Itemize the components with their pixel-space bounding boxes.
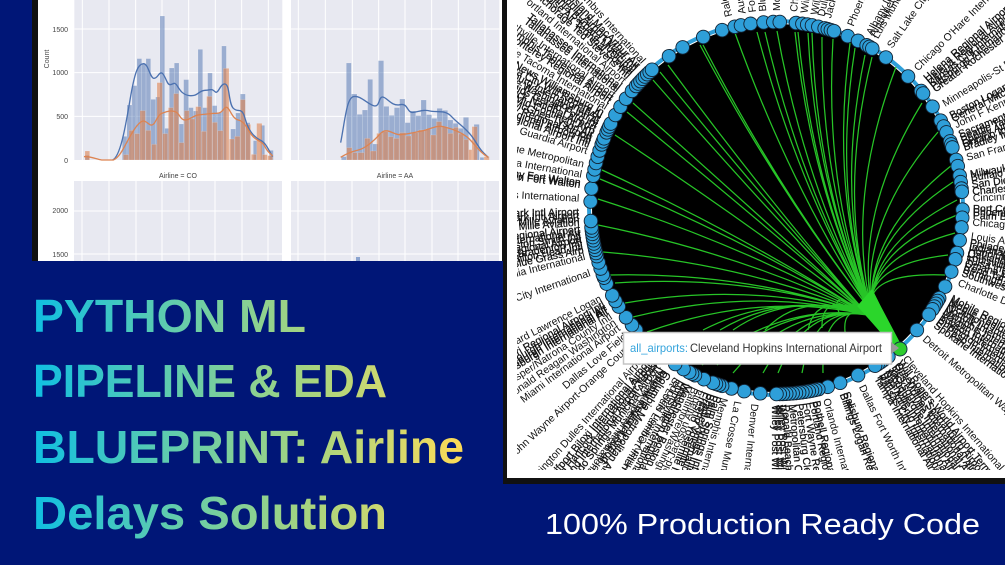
airport labels: Baltimore/Washington International	[623, 385, 700, 539]
airport labels: Colorado Springs Municipal Airport	[556, 362, 663, 499]
airport labels: Bill & Hillary Clinton National	[607, 376, 684, 497]
network ring	[585, 17, 967, 399]
airport labels: La Guardia Airport	[504, 121, 589, 157]
airport labels: Columbia Metropolitan Airport	[587, 369, 673, 492]
airport labels: Sioux Falls Regional Airport	[451, 224, 581, 249]
airport labels: Orlando International	[820, 397, 857, 495]
axis labels: 2000	[52, 208, 68, 215]
airport labels: Bradley International Intl	[668, 392, 717, 503]
airport labels: Little Rock National Airport	[480, 73, 598, 134]
airport labels: Washington Dulles International Airport	[519, 351, 649, 494]
airport labels: George Bush Intercontinental	[581, 367, 669, 485]
axis labels: 1500	[52, 27, 68, 34]
airport labels: Newport News Williamsburg In	[475, 39, 606, 119]
airport labels: Tampa International	[490, 153, 583, 181]
airport labels: Fresno Yosemite Intl Airport	[653, 389, 710, 514]
airport labels: Hartsfield-Jackson Atlanta	[647, 387, 706, 504]
airport labels: Syracuse Hancock International Airport	[534, 358, 658, 507]
airport labels: Ronald Reagan Washington	[504, 317, 619, 402]
airport labels: Harrisburg International Air	[486, 57, 603, 125]
panel: histogram screenshot	[32, 0, 503, 261]
airport labels: Lexington Blue Grass Airp	[464, 244, 585, 281]
airport labels: Newark Liberty International Airport	[563, 365, 667, 507]
airport labels: Grand Rapids Gerald Ford Int	[469, 62, 600, 131]
tooltip: Cleveland Hopkins International Airport	[624, 332, 899, 364]
airport labels: Monterey Regional Airport	[505, 30, 614, 107]
airport labels: Savannah Hilton Head Intl	[462, 241, 584, 276]
airport labels: Washington Regional Airport	[620, 380, 691, 504]
airport labels: Greenville Spartanburg Airport	[892, 360, 988, 479]
network nodes	[584, 15, 969, 401]
axis labels	[44, 27, 414, 259]
airport labels: Knoxville McGhee Tyson Air	[470, 81, 596, 141]
airport labels: Dallas Love Field	[560, 331, 630, 392]
airport labels: Philadelphia International	[469, 251, 587, 291]
airport labels: La Crosse Municipal	[713, 400, 743, 496]
airport labels: Greater Rochester	[930, 33, 1005, 95]
airport labels: Metropolitan Oakland	[786, 404, 807, 504]
airport labels: Monroe Regional Airport Intl	[466, 91, 593, 147]
axis labels: Airline = CO	[159, 173, 198, 180]
airport labels: Des Moines International Airport	[889, 362, 989, 489]
airport labels: Montgomery Regional Airport	[463, 84, 594, 144]
axis labels: 500	[56, 114, 68, 121]
airport labels: Albuquerque International Airport	[883, 367, 981, 499]
airport labels: Nashville International Airport	[499, 13, 618, 101]
airport labels: Lafayette Regional Airport Intl	[457, 94, 591, 150]
airport labels: Los Angeles International	[461, 187, 580, 205]
title: Delays Solution	[33, 487, 387, 539]
airport labels: Casper/Natrona County Intl	[501, 311, 615, 390]
airport labels: Manchester Boston Regional	[624, 382, 694, 508]
airport labels: Missouri Regional Airport Intl	[484, 299, 607, 374]
airport labels: Fort Wayne Regional	[800, 402, 827, 501]
axis labels: 1000	[52, 70, 68, 77]
airport labels: Sarasota Bradenton Intl	[472, 237, 583, 268]
airport labels: Salisbury Regional	[840, 390, 883, 476]
airport labels: Billings Logan Regional	[837, 391, 886, 499]
airport labels: San Antonio International Airport	[877, 370, 970, 503]
tooltip: Cleveland Hopkins International Airport: all_airports:	[630, 341, 688, 355]
airport labels: Miami International Airport	[518, 323, 623, 406]
airport labels: Baltimore Washington Intl Ai	[478, 60, 601, 128]
tooltip: Cleveland Hopkins International Airport: Cleveland Hopkins International Airport	[690, 341, 883, 355]
chart: airline CO histogram	[74, 0, 282, 160]
airport labels: Nashville International Airport	[880, 369, 967, 489]
airport labels: Memphis International	[692, 396, 730, 499]
airport labels: Wiley Post Will Rogers	[772, 405, 786, 511]
airport labels: Petersburg Clearwater	[793, 403, 818, 509]
airport labels: Will Rogers World Airport Terminal	[895, 358, 1004, 489]
airport labels: Tallahassee International	[522, 16, 622, 95]
airport labels: Lubbock Preston Smith Intl	[456, 230, 582, 260]
airport labels: Jacksonville International Airport	[886, 364, 984, 493]
airport labels: Destiny Fort Walton	[489, 165, 582, 189]
airport labels: Oklahoma City Will Rogers Ai	[478, 47, 604, 122]
airport labels: Kansas City International Airport	[874, 372, 964, 506]
chart: airline AA histogram	[291, 0, 499, 160]
airport labels: Denver International	[739, 403, 760, 498]
axis labels: Airline = AA	[377, 173, 414, 180]
airport labels: Bothell Regional	[810, 400, 838, 477]
airport labels: Wiley Post Will Rogers	[776, 405, 792, 511]
airport labels: Huntsville International	[627, 379, 688, 478]
airport labels: Dallas Fort Worth International	[856, 383, 929, 516]
airport labels	[517, 0, 1005, 470]
tagline: 100% Production Ready Code	[545, 509, 980, 541]
airport labels: Palm Springs International	[676, 394, 723, 516]
airport labels: Wiley Post Will Rogers	[769, 405, 781, 511]
title	[33, 290, 464, 539]
airport labels: Palm Springs International	[670, 393, 720, 514]
airport labels: Rapid City Regional Airport	[456, 234, 583, 265]
axis labels: 0	[64, 158, 68, 165]
airport labels: Pittsburgh International Air	[498, 304, 610, 377]
axis labels: 1500	[52, 252, 68, 259]
chart: lower panels	[74, 181, 499, 261]
airport labels: Pittsburgh International Air	[500, 306, 612, 380]
airport labels: Pittsburgh International Air	[496, 302, 609, 374]
airport labels: Portland Regional	[807, 400, 834, 485]
airport labels: Baton Rouge Metropolitan	[464, 131, 585, 171]
airport labels: Wichita Mid Continent Airp	[479, 78, 597, 138]
axis labels: Count	[44, 50, 51, 68]
airport labels: Tallahassee International	[525, 11, 624, 92]
title: BLUEPRINT: Airline	[33, 421, 464, 473]
airport labels: Seattle Tacoma International	[490, 34, 610, 113]
airport labels: Federal Mille Aviation	[480, 213, 580, 231]
airport labels: Pensacola International Air	[456, 227, 582, 254]
title: PIPELINE & EDA	[33, 355, 387, 407]
airport labels: Memphis Tennessee Airport	[502, 21, 616, 104]
airport labels: Gulfport Biloxi International Airport	[543, 356, 655, 485]
title: PYTHON ML	[33, 290, 306, 342]
airport labels: John Wayne Airport-Orange County	[507, 338, 637, 461]
airport labels: County Regional Airport	[598, 367, 670, 466]
airport labels: Metro Park Intl Airport	[477, 206, 579, 220]
airport labels: Federal Mille Aviation	[480, 217, 580, 236]
airport labels: Destin Fort Walton	[494, 168, 581, 191]
airport labels: Ronald Beach Intl	[779, 404, 796, 488]
panel: airport network screenshot	[503, 0, 1005, 484]
airport labels: Tampa International Airport	[871, 374, 946, 488]
airport labels: St Louis Lambert International	[601, 375, 682, 502]
airport labels: General Edward Lawrence Logan	[459, 293, 604, 375]
airport labels: Metro Park Intl Airport	[477, 210, 579, 225]
airport labels: Roswell City International	[476, 267, 592, 317]
airport labels: Midland International Airport Texas	[552, 360, 660, 494]
airport labels: Fresno Yosemite Intl Airport	[658, 391, 713, 516]
highlighted node: Cleveland	[893, 342, 907, 356]
network edges	[598, 31, 957, 373]
